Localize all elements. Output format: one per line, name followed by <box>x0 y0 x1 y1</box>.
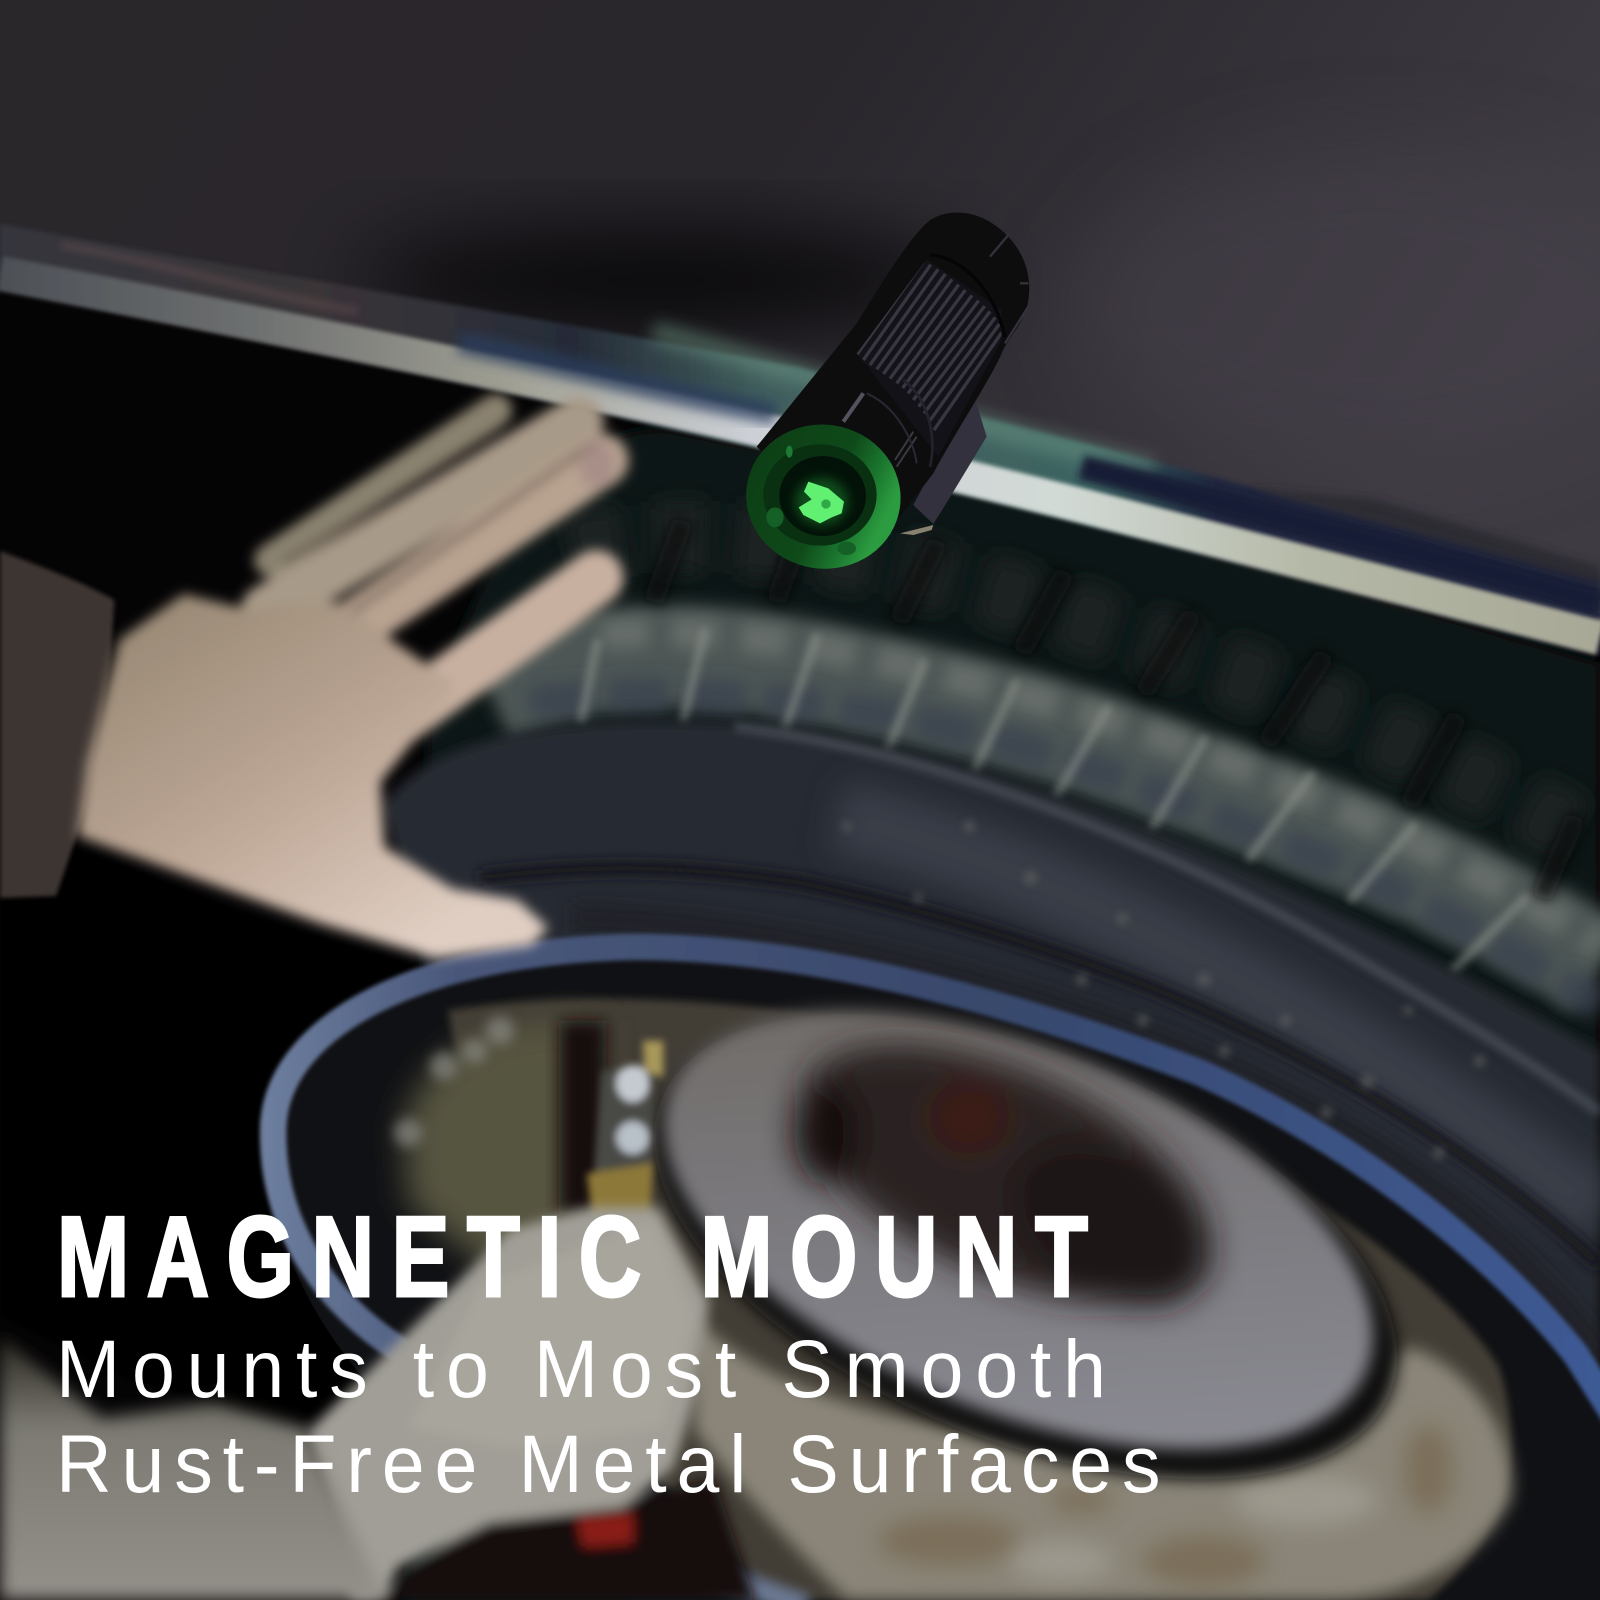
blue sidewall ring <box>273 947 1600 1429</box>
wheel interior <box>267 944 1600 1600</box>
glove holding gauge <box>306 1207 755 1600</box>
wheel rim <box>267 920 1600 1600</box>
rim wall <box>448 999 1511 1600</box>
trim highlight <box>0 273 1600 638</box>
forearm sleeve <box>0 1337 386 1600</box>
air chuck <box>587 1041 663 1255</box>
ring lower segment <box>628 1536 806 1600</box>
trim blue band <box>459 342 776 413</box>
tread edge rib <box>735 727 1600 1112</box>
hub centre <box>763 991 1247 1356</box>
black jacket <box>0 842 439 1429</box>
green bezel <box>737 415 910 579</box>
tyre shoulder <box>408 429 1600 1600</box>
valve dark strip <box>559 1020 606 1214</box>
lug and chrome cluster <box>403 1020 602 1286</box>
subtitle: Mounts to Most Smooth <box>56 1323 1106 1415</box>
chrome wheel-arch trim <box>0 223 1600 655</box>
trim pink streak <box>61 245 357 311</box>
sidewall speckle <box>842 820 1486 1159</box>
index finger <box>390 578 596 724</box>
neck grooves <box>843 393 863 422</box>
trim dark line <box>1082 467 1600 602</box>
palm <box>78 594 548 958</box>
pale patches <box>1010 1473 1378 1582</box>
mount bracket <box>913 393 987 524</box>
tyre <box>383 429 1600 1600</box>
ring finger <box>266 421 579 610</box>
fluted barrel <box>857 259 1002 457</box>
dark under glove <box>378 1480 755 1600</box>
ring-side dark lip <box>571 918 1600 1357</box>
tyre sidewall <box>383 721 1600 1531</box>
flashlight body <box>757 212 1029 517</box>
tyre tread band <box>490 656 1600 969</box>
hand on tyre <box>78 410 615 958</box>
hub disc <box>602 921 1435 1539</box>
sidewall groove <box>480 868 1600 1265</box>
bezel inner ring <box>763 444 877 546</box>
subtitle <box>56 1323 1160 1510</box>
subtitle: Rust-Free Metal Surfaces <box>56 1418 1160 1510</box>
finger gaps <box>284 429 597 612</box>
tread lugs <box>602 633 1600 944</box>
car body lower edge right <box>1250 488 1600 584</box>
bezel studs <box>766 507 784 527</box>
title: MAGNETIC MOUNT <box>57 1194 1105 1321</box>
dark upper tread grooves <box>653 520 1577 898</box>
fingertip tint <box>579 440 615 489</box>
red gauge base <box>577 1512 633 1547</box>
car body panel <box>0 0 1600 714</box>
rust patches <box>878 1424 1453 1588</box>
sidewall lighter band <box>837 816 1600 1214</box>
little finger <box>270 410 496 560</box>
hub shadow <box>589 920 1462 1574</box>
LED glow <box>795 478 848 526</box>
rusty rim <box>694 1316 1512 1600</box>
tread sipes <box>582 633 1525 969</box>
tail ring detail <box>990 235 1028 343</box>
shoulder tread blocks <box>571 537 1600 847</box>
trim green reflection <box>653 332 1153 469</box>
sleeve cuff <box>0 551 114 898</box>
LED emitter <box>799 482 844 523</box>
flashlight <box>737 212 1029 579</box>
middle finger <box>321 460 602 648</box>
